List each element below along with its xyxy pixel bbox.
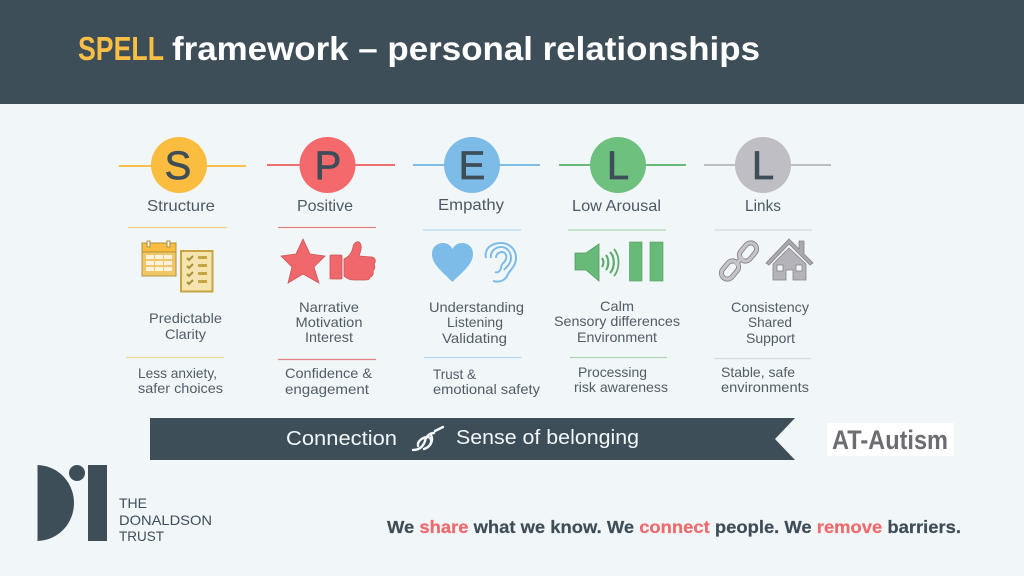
- Empathy points: Validating: [442, 330, 507, 346]
- S badge: [151, 137, 207, 193]
- Structure outcome: [138, 365, 223, 396]
- L badge: [590, 137, 646, 193]
- logo wordmark: DONALDSON: [119, 512, 212, 528]
- Empathy outcome: Trust &: [433, 366, 477, 382]
- Links outcome: Stable, safe: [721, 364, 795, 380]
- Positive points: Narrative: [299, 299, 359, 315]
- panel: Empathy: [413, 137, 540, 397]
- title: framework – personal relationships: [172, 30, 760, 67]
- Links points: Support: [746, 330, 795, 346]
- panel: Structure: [119, 137, 246, 396]
- logo wordmark: THE: [119, 495, 147, 511]
- Structure points: Predictable: [149, 310, 222, 326]
- Structure points: Clarity: [165, 326, 206, 342]
- logo wordmark: TRUST: [119, 528, 164, 544]
- L badge: L: [607, 144, 629, 188]
- Structure outcome: safer choices: [138, 380, 223, 396]
- icon: chain: [719, 240, 759, 282]
- Structure points: [149, 310, 222, 342]
- Positive outcome: Confidence &: [285, 365, 373, 381]
- Low Arousal outcome: Processing: [578, 364, 647, 380]
- panel: Links: [704, 137, 831, 395]
- Links points: [731, 299, 809, 346]
- E badge: E: [459, 144, 485, 188]
- icon: checklist: [181, 251, 212, 292]
- panel: Low Arousal: [554, 137, 686, 395]
- icon: calendar: [142, 241, 176, 276]
- L badge: [735, 137, 791, 193]
- Low Arousal points: Sensory differences: [554, 313, 680, 329]
- P badge: [300, 137, 356, 193]
- Positive outcome: [285, 365, 373, 397]
- icon: ear: [486, 243, 516, 282]
- Links outcome: [721, 364, 809, 395]
- Links points: Shared: [748, 314, 792, 330]
- logo mark: [38, 465, 107, 541]
- logo wordmark: [119, 495, 212, 544]
- icon: star: [281, 239, 325, 283]
- icon: thumbs up: [330, 242, 375, 280]
- Low Arousal outcome: [574, 364, 668, 395]
- Connection label: Connection: [286, 428, 397, 450]
- S badge: S: [165, 144, 191, 188]
- Low Arousal heading: Low Arousal: [572, 198, 661, 215]
- Empathy points: [429, 299, 524, 346]
- Sense of belonging label: Sense of belonging: [456, 427, 639, 449]
- L badge: L: [752, 144, 774, 188]
- Positive points: Interest: [305, 329, 353, 345]
- Low Arousal points: Calm: [600, 298, 634, 314]
- Low Arousal points: Environment: [577, 329, 657, 345]
- Positive points: Motivation: [296, 314, 362, 330]
- panel: Positive: [267, 137, 395, 397]
- AT-Autism logo: AT-Autism: [832, 425, 948, 455]
- tagline: We share what we know. We connect people. We remove barriers.: [387, 517, 961, 537]
- icon: rope link: [413, 427, 443, 450]
- Empathy heading: Empathy: [438, 197, 504, 214]
- Low Arousal points: [554, 298, 680, 345]
- title: SPELL: [78, 30, 164, 67]
- header band: [0, 0, 1024, 104]
- connection banner: [150, 418, 795, 460]
- Empathy points: Listening: [447, 314, 503, 330]
- icon: pause bars: [630, 242, 663, 281]
- Empathy outcome: emotional safety: [433, 381, 540, 397]
- icon: house: [766, 239, 813, 280]
- Structure outcome: Less anxiety,: [138, 365, 217, 381]
- Low Arousal outcome: risk awareness: [574, 379, 668, 395]
- Positive heading: Positive: [297, 198, 353, 215]
- Positive points: [296, 299, 362, 345]
- Positive outcome: engagement: [285, 381, 369, 397]
- Links points: Consistency: [731, 299, 809, 315]
- Structure heading: Structure: [147, 198, 215, 215]
- Empathy points: Understanding: [429, 299, 524, 315]
- Links heading: Links: [745, 198, 781, 215]
- Empathy outcome: [433, 366, 540, 397]
- icon: heart: [432, 243, 473, 282]
- The Donaldson Trust logo: [38, 465, 212, 544]
- Links outcome: environments: [721, 379, 809, 395]
- E badge: [444, 137, 500, 193]
- icon: speaker: [575, 244, 618, 281]
- P badge: P: [315, 144, 341, 188]
